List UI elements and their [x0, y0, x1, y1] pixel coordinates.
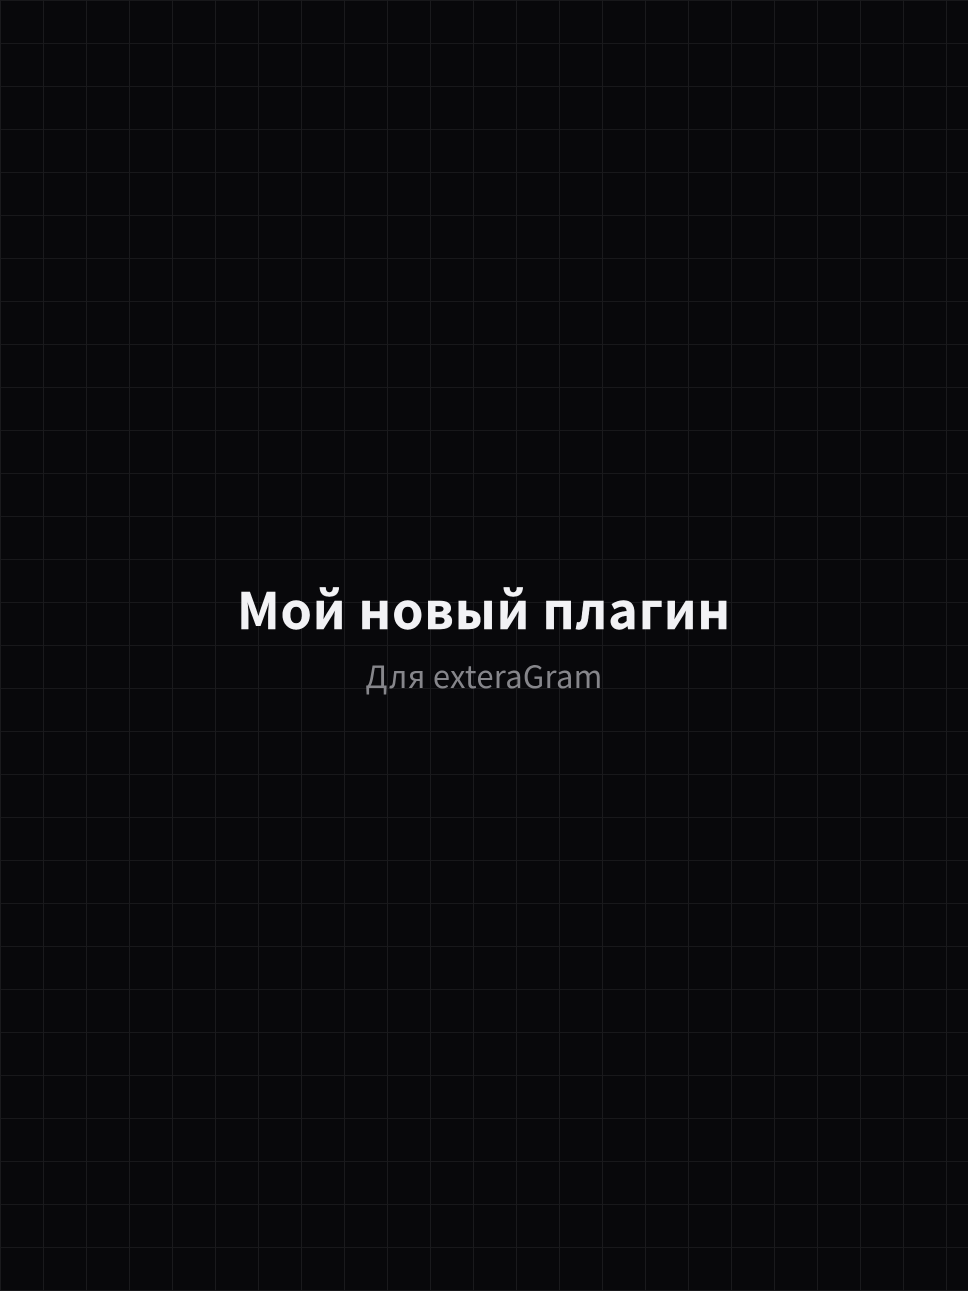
subtitle: Для exteraGram — [365, 652, 603, 697]
title: Мой новый плагин — [237, 572, 731, 644]
